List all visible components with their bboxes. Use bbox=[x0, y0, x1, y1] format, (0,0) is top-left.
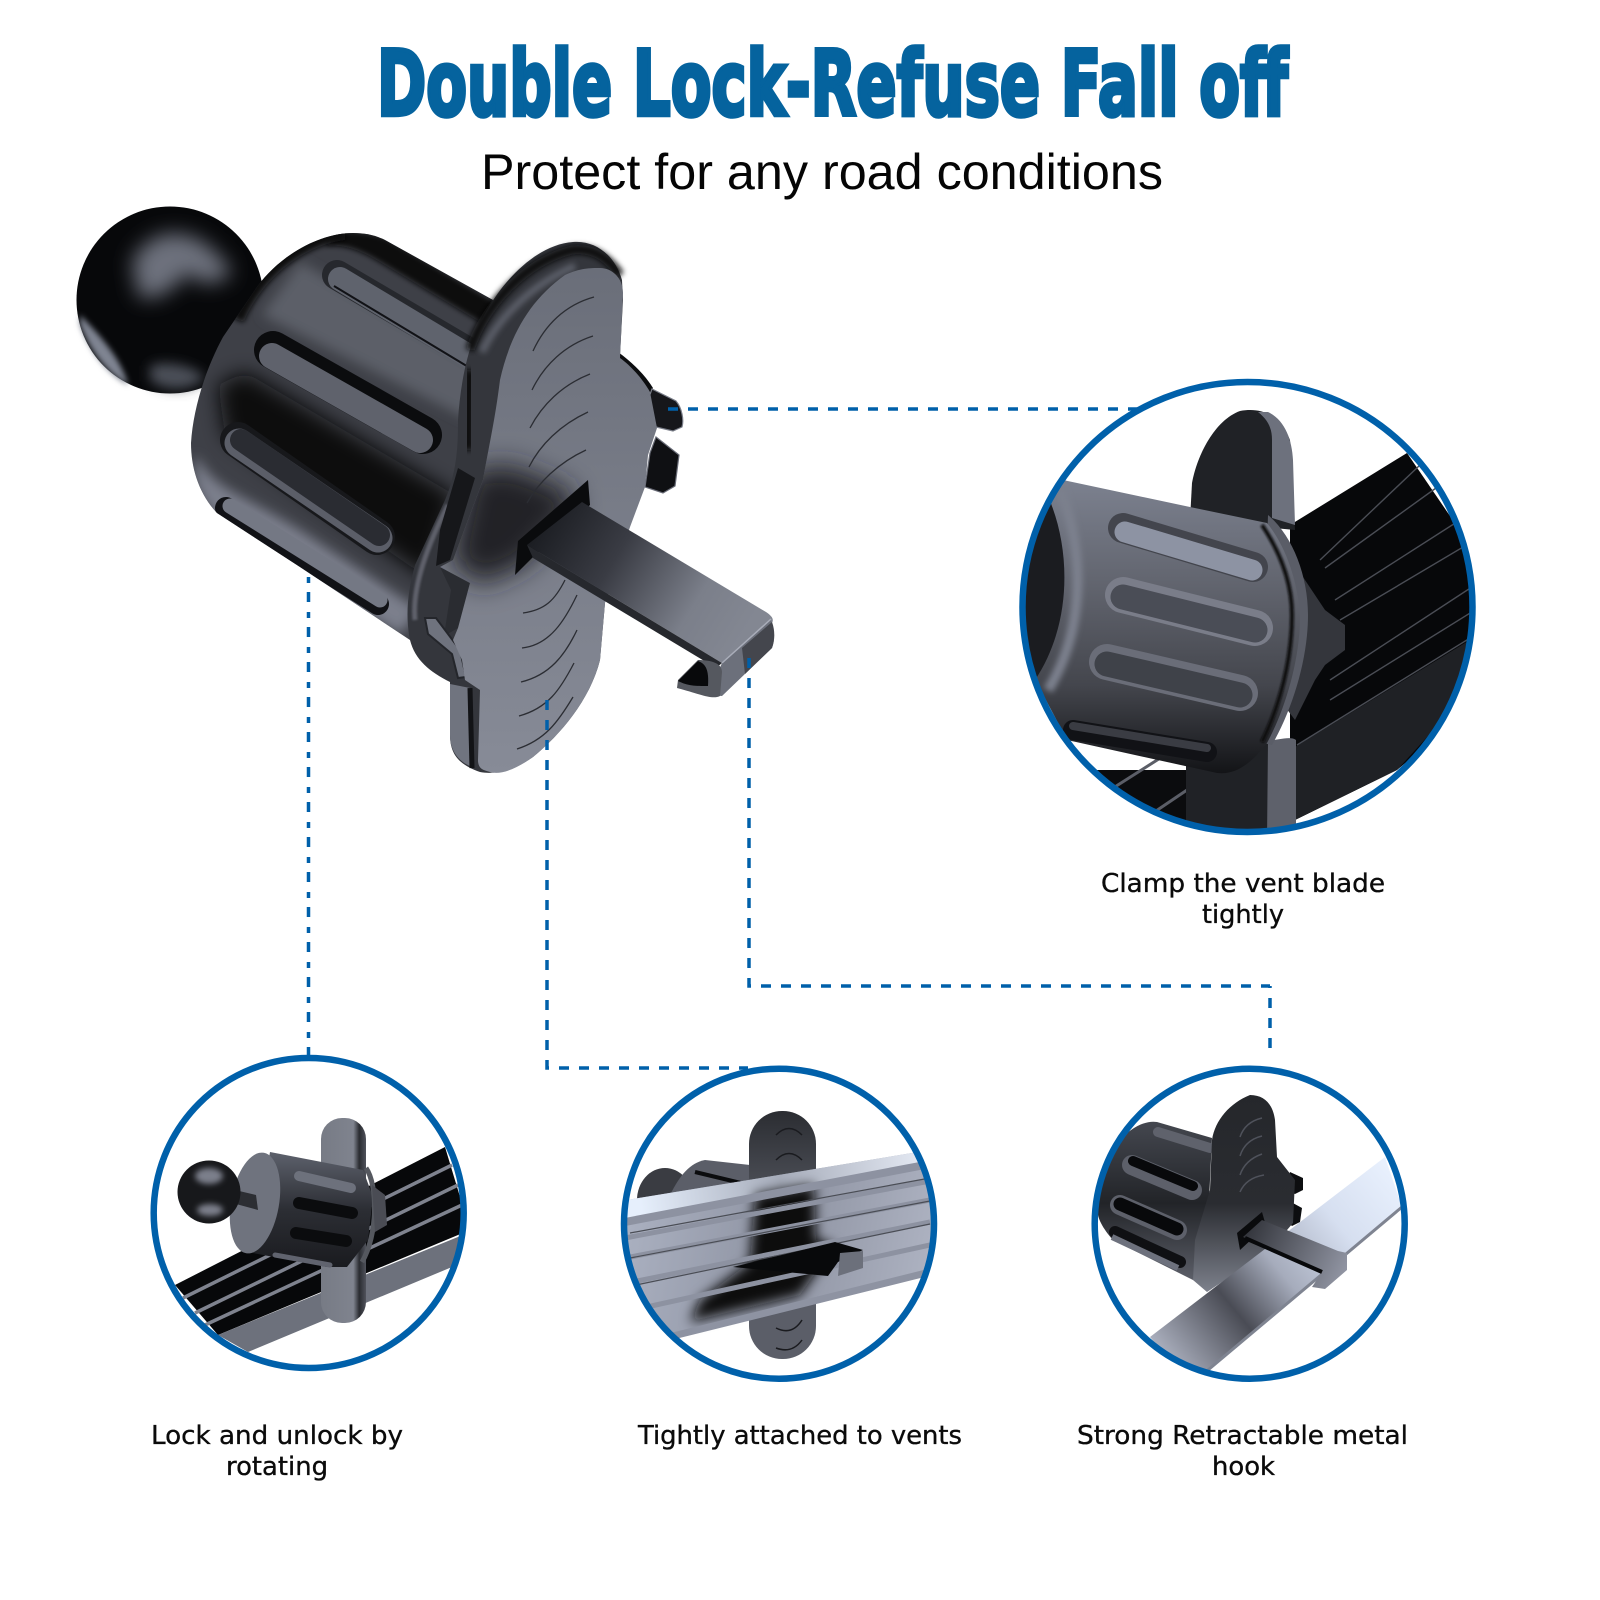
barrel bbox=[1098, 1122, 1212, 1285]
groove 4 bbox=[226, 506, 380, 604]
neck bbox=[238, 1191, 258, 1210]
caption: metal hook: hook bbox=[1212, 1452, 1275, 1482]
caption: clamp: Clamp the vent blade bbox=[1101, 869, 1385, 899]
caption: clamp: tightly bbox=[1202, 900, 1284, 930]
barrel grooves bbox=[275, 1176, 352, 1265]
plate bbox=[321, 1118, 366, 1323]
vent blades bbox=[620, 1152, 950, 1338]
slot bbox=[515, 480, 590, 575]
dashed connector: hook to metal hook circle bbox=[749, 658, 1270, 1048]
barrel bbox=[1010, 480, 1300, 773]
caption: lock and unlock bbox=[151, 1421, 403, 1482]
tabs bbox=[1290, 1172, 1303, 1226]
hook strap bbox=[1243, 1220, 1347, 1289]
circle: tightly attached bbox=[620, 1069, 950, 1379]
barrel body bbox=[191, 231, 500, 640]
caption: metal hook: Strong Retractable metal bbox=[1077, 1421, 1408, 1451]
dashed connector: hook tab to top-right circle bbox=[668, 407, 1138, 411]
ball bbox=[178, 1160, 240, 1224]
subtitle: Protect for any road conditions bbox=[481, 144, 1163, 200]
main product: vent clip mount bbox=[76, 206, 774, 773]
infographic canvas bbox=[76, 44, 1476, 1481]
dashed connector: barrel to lock circle bbox=[307, 577, 310, 1056]
slot bbox=[1237, 1212, 1266, 1250]
plate top and bottom bbox=[749, 1111, 816, 1359]
barrel bbox=[253, 1152, 373, 1267]
groove 2 bbox=[272, 350, 423, 440]
metal hook strap bbox=[527, 502, 774, 697]
vent strip bbox=[1150, 1157, 1402, 1385]
ball joint bbox=[76, 206, 264, 394]
upper tab bbox=[1190, 410, 1295, 530]
flange rim bbox=[408, 242, 623, 773]
flange notch shadow bbox=[436, 468, 475, 566]
circle: clamp the vent blade bbox=[1000, 382, 1480, 840]
barrel end cap bbox=[1026, 504, 1064, 676]
vent blades bbox=[1097, 453, 1470, 820]
barrel end face bbox=[230, 1152, 280, 1254]
vent strip bbox=[175, 1147, 470, 1352]
caption: clamp bbox=[1101, 869, 1385, 930]
groove 1 bbox=[334, 275, 490, 369]
center bracket bbox=[1288, 578, 1345, 720]
caption: lock and unlock: rotating bbox=[226, 1452, 328, 1482]
small latch bbox=[425, 618, 466, 678]
circle: lock and unlock bbox=[154, 1058, 470, 1368]
front plate bbox=[440, 268, 657, 773]
plate bbox=[1193, 1095, 1295, 1292]
flange band bbox=[1266, 515, 1308, 744]
center bracket bbox=[372, 1185, 387, 1232]
rear retaining hooks bbox=[618, 352, 683, 493]
groove 3 bbox=[238, 440, 379, 538]
dashed connector: plate to vents circle bbox=[547, 700, 748, 1068]
circle: metal hook bbox=[1095, 1069, 1405, 1385]
grooves bbox=[1073, 528, 1255, 752]
hook end bbox=[733, 1242, 863, 1276]
curved ridges bbox=[517, 297, 594, 749]
shadow of plate through vents bbox=[690, 1185, 835, 1322]
caption: tightly attached: Tightly attached to vents bbox=[637, 1421, 962, 1451]
lower stem bbox=[1186, 744, 1268, 829]
caption: lock and unlock: Lock and unlock by bbox=[151, 1421, 403, 1451]
ball and barrel behind bbox=[637, 1160, 749, 1198]
flange shadow bbox=[1262, 525, 1292, 742]
caption: metal hook bbox=[1077, 1421, 1408, 1482]
